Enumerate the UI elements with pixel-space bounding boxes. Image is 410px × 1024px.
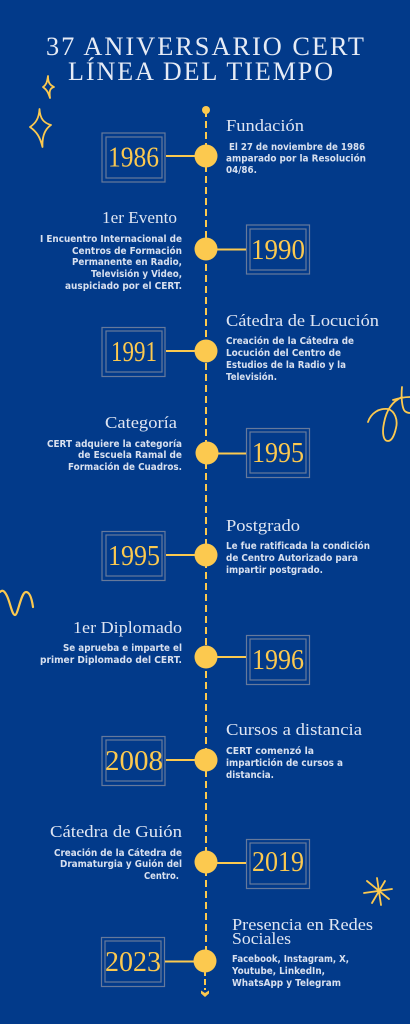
- icon: asterisk star: [364, 878, 392, 905]
- title: [46, 31, 366, 86]
- event: 2019 Cátedra de Guión: Dramaturgia y Guión del: [60, 858, 182, 870]
- event: 1995 Categoría: 1995: [252, 437, 304, 469]
- event: 1995 Postgrado: Le fue ratificada la condición: [226, 540, 370, 552]
- event: 1990 1er Evento: Televisión y Video,: [91, 268, 182, 280]
- event: 1986 Fundación: El 27 de noviembre de 1986: [229, 142, 365, 153]
- icon: wave doodle: [0, 591, 33, 615]
- event: 1991 Cátedra de Locución: Creación de la Cátedra de: [226, 335, 354, 347]
- event: 1991 Cátedra de Locución: Cátedra de Locución: [226, 311, 380, 330]
- event: 2023 Presencia en Redes Sociales: Presencia en Redes: [232, 915, 373, 934]
- event: 1990 1er Evento: I Encuentro Internacional de: [40, 234, 182, 245]
- event: 1995 Postgrado: Postgrado: [226, 516, 300, 535]
- event: 1996 1er Diplomado: primer Diplomado del CERT.: [40, 655, 182, 666]
- event: 2008 Cursos a distancia: [102, 720, 362, 786]
- event: 1996 1er Diplomado: 1996: [252, 644, 304, 676]
- event: 2023 Presencia en Redes Sociales: 2023: [105, 946, 161, 978]
- event: 1990 1er Evento: Centros de Formación: [72, 245, 182, 257]
- event: 1995 Postgrado: de Centro Autorizado para: [226, 553, 358, 564]
- event: 2023 Presencia en Redes Sociales: [102, 915, 373, 989]
- title: LÍNEA DEL TIEMPO: [68, 56, 335, 86]
- event: 2019 Cátedra de Guión: Centro.: [144, 871, 179, 882]
- event: 2023 Presencia en Redes Sociales: Youtube, LinkedIn,: [231, 966, 325, 977]
- event: 2008 Cursos a distancia: CERT comenzó la: [226, 745, 314, 757]
- event: 2019 Cátedra de Guión: [50, 822, 310, 888]
- event: 1986 Fundación: [102, 116, 366, 182]
- timeline axis: [202, 106, 210, 990]
- event: 2008 Cursos a distancia: distancia.: [226, 770, 274, 781]
- event: 2019 Cátedra de Guión: Cátedra de Guión: [50, 822, 183, 841]
- event: 1990 1er Evento: 1990: [251, 234, 305, 266]
- event: 1986 Fundación: amparado por la Resolución: [226, 152, 366, 164]
- event: 1991 Cátedra de Locución: Estudios de la Radio y la: [226, 360, 346, 371]
- event: 1990 1er Evento: [40, 208, 310, 292]
- event: 2008 Cursos a distancia: 2008: [105, 745, 163, 777]
- event: 2023 Presencia en Redes Sociales: Sociales: [232, 929, 291, 948]
- event: 1986 Fundación: 1986: [108, 142, 159, 174]
- event: 1991 Cátedra de Locución: [102, 311, 380, 383]
- event: 1990 1er Evento: 1er Evento: [102, 208, 177, 227]
- event: 1991 Cátedra de Locución: 1991: [111, 336, 157, 368]
- icon: curl doodle: [368, 387, 410, 441]
- arrow head: [201, 990, 209, 997]
- event: 1991 Cátedra de Locución: Locución del Centro de: [226, 347, 341, 359]
- icon: small sparkle: [43, 76, 54, 98]
- event: 2023 Presencia en Redes Sociales: Facebook, Instagram, X,: [232, 954, 349, 965]
- event: 1996 1er Diplomado: Se aprueba e imparte el: [63, 643, 182, 654]
- event: 2023 Presencia en Redes Sociales: WhatsApp y Telegram: [232, 978, 341, 989]
- event: 1995 Postgrado: 1995: [108, 540, 160, 572]
- event: 1986 Fundación: Fundación: [226, 116, 305, 135]
- icon: large sparkle: [30, 109, 51, 147]
- event: 1995 Postgrado: impartir postgrado.: [226, 565, 323, 576]
- event: 2019 Cátedra de Guión: Creación de la Cátedra de: [54, 847, 182, 859]
- event: 1995 Postgrado: [102, 516, 370, 580]
- title: 37 ANIVERSARIO CERT: [46, 31, 366, 61]
- event: 1995 Categoría: Categoría: [105, 413, 177, 432]
- event: 1995 Categoría: [47, 413, 310, 478]
- event: 1995 Categoría: Formación de Cuadros.: [68, 461, 182, 473]
- event: 1986 Fundación: 04/86.: [226, 165, 257, 176]
- event: 1995 Categoría: CERT adquiere la categoría: [47, 438, 182, 450]
- event: 2008 Cursos a distancia: Cursos a distancia: [226, 720, 362, 739]
- event: 1990 1er Evento: auspiciado por el CERT.: [65, 281, 182, 292]
- event: 1991 Cátedra de Locución: Televisión.: [226, 371, 277, 383]
- event: 2019 Cátedra de Guión: 2019: [252, 846, 304, 878]
- event: 1996 1er Diplomado: [40, 618, 310, 684]
- event: 1996 1er Diplomado: 1er Diplomado: [73, 618, 182, 637]
- event: 1990 1er Evento: Permanente en Radio,: [72, 257, 182, 268]
- event: 2008 Cursos a distancia: impartición de cursos a: [226, 757, 343, 769]
- event: 1995 Categoría: de Escuela Ramal de: [78, 450, 182, 461]
